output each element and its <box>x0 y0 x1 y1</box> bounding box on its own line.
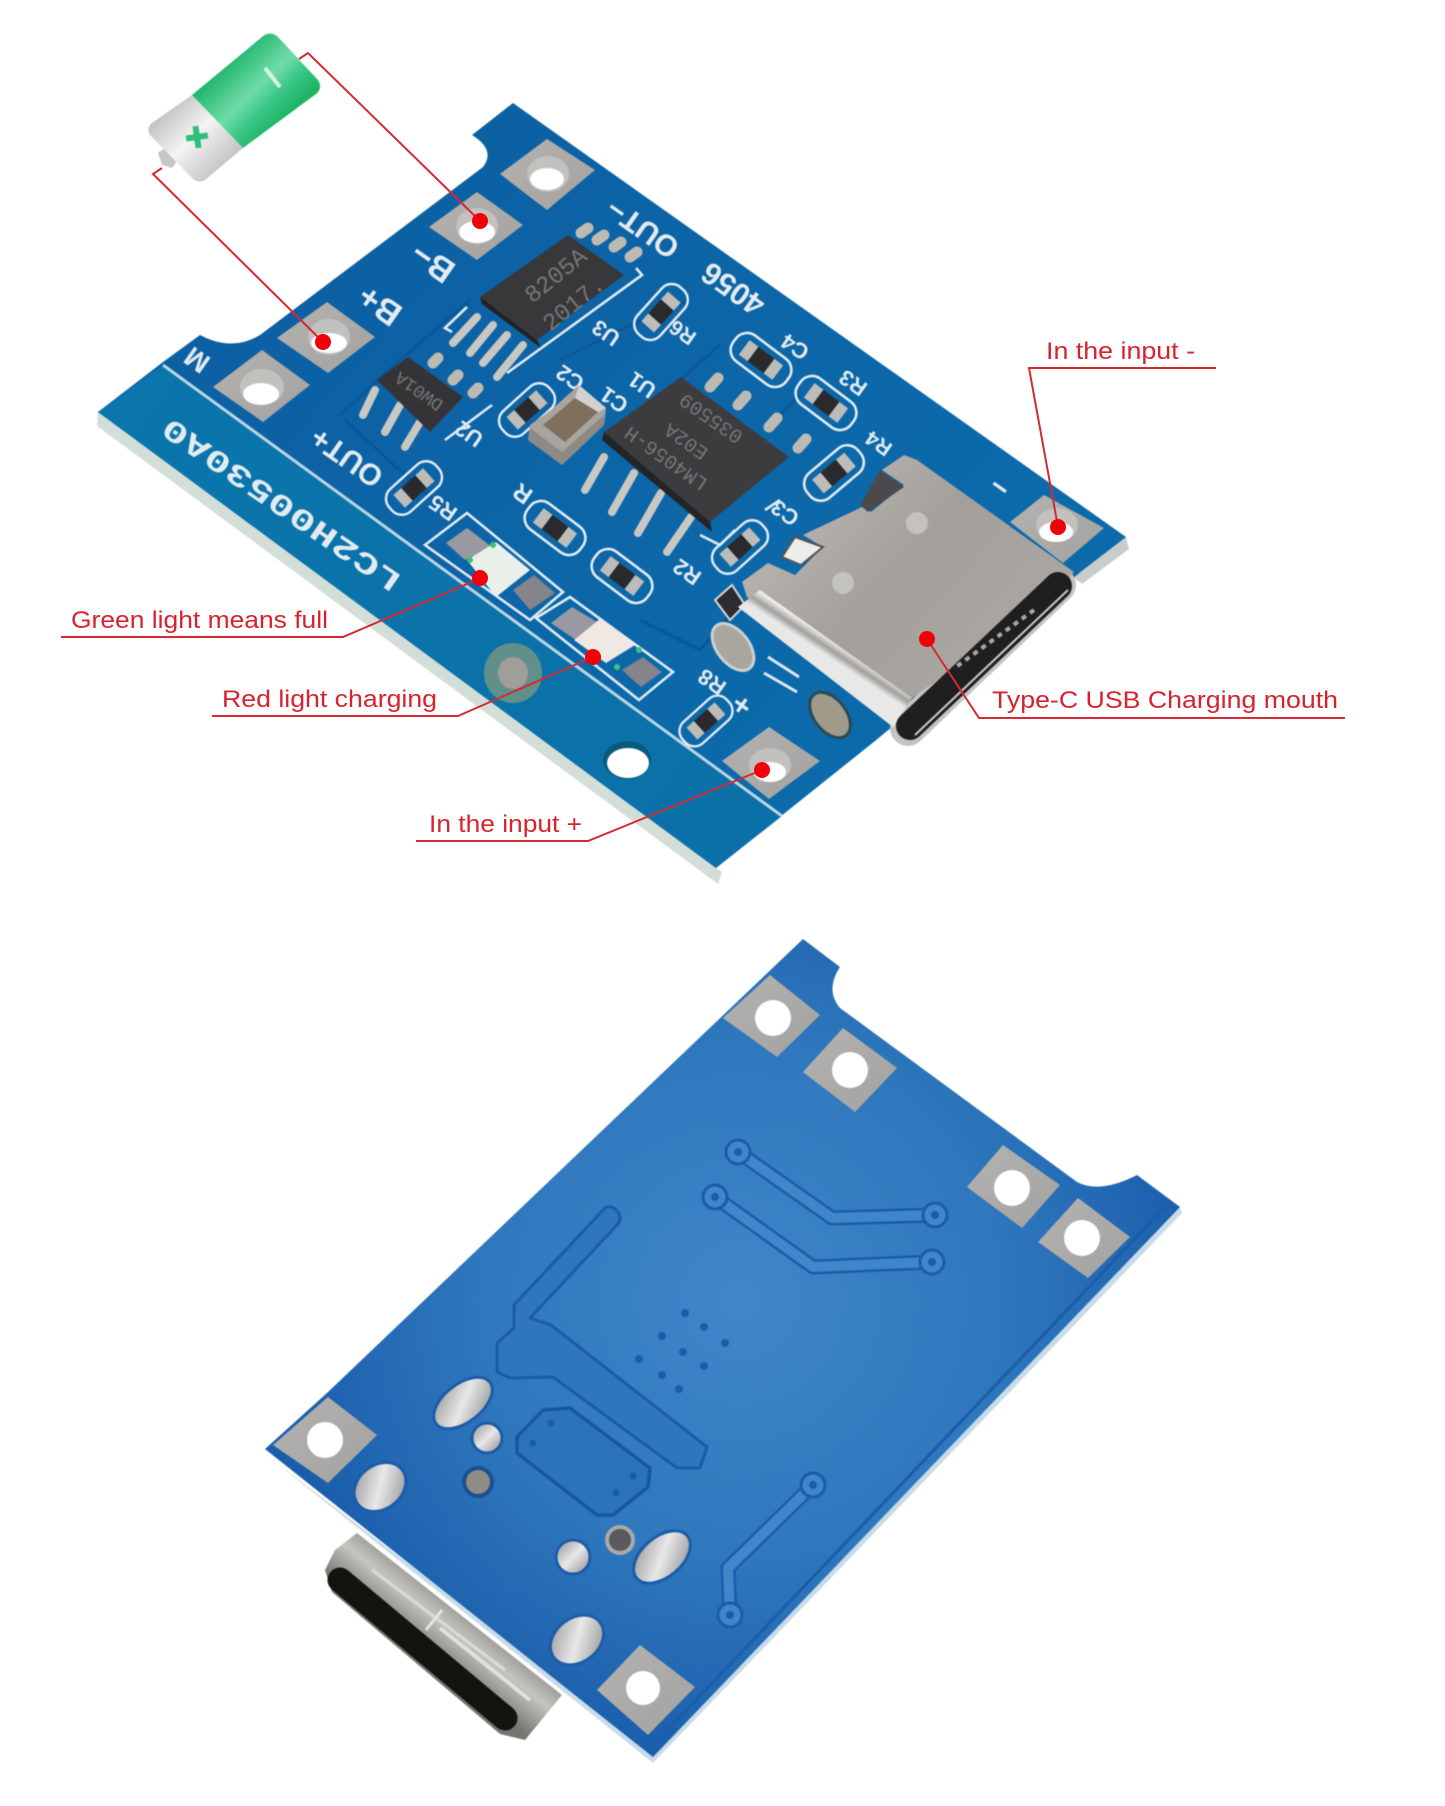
callout: In the input +: In the input + <box>429 811 582 838</box>
silkscreen labels: + <box>725 686 759 724</box>
chip: LM4056: E02A <box>661 417 713 463</box>
capacitor C1 <box>528 385 606 465</box>
silkscreen labels: R2 <box>668 554 706 590</box>
chip: DW01A <box>363 357 492 447</box>
chip: LM4056: 035509 <box>676 387 748 447</box>
pad 4 <box>1038 1198 1130 1278</box>
pad 5 <box>273 1397 377 1483</box>
silkscreen labels: R6 <box>665 315 701 349</box>
silkscreen labels: OUT− <box>600 191 686 265</box>
silkscreen labels: U3 <box>587 315 625 351</box>
plus sign <box>185 125 209 149</box>
silkscreen labels: R <box>508 477 538 509</box>
silkscreen labels: R5 <box>424 490 462 526</box>
connector shell top <box>742 455 1074 713</box>
callout: Red light charging: Red light charging <box>222 686 437 713</box>
callout: In the input - <box>1029 338 1216 535</box>
board edge <box>265 1207 1182 1763</box>
callout: battery positive to B+ <box>153 168 331 350</box>
traces <box>703 1140 947 1627</box>
callout: Green light means full: Green light means full <box>71 607 328 634</box>
pad: B- <box>429 192 523 260</box>
silkscreen labels: R4 <box>861 426 897 460</box>
chip: LM4056 <box>585 377 806 552</box>
chip: 8205A <box>445 228 642 377</box>
battery tip <box>158 148 178 168</box>
pad 3 <box>967 1145 1060 1228</box>
connector opening <box>910 586 1058 726</box>
silkscreen labels: OUT+ <box>304 420 390 494</box>
silkscreen labels: R8 <box>693 664 731 700</box>
silkscreen labels: M <box>179 341 215 379</box>
dimples <box>832 512 928 594</box>
callout: battery negative to B- <box>299 53 488 229</box>
copper traces <box>340 300 800 650</box>
silkscreen labels: C4 <box>776 328 814 365</box>
battery silver end <box>148 95 243 182</box>
edge trace <box>660 1207 1165 1738</box>
pad: M <box>213 350 310 422</box>
shiny side strip <box>738 590 912 727</box>
chip: 8205A: 8205A <box>521 243 594 310</box>
pad: B+ <box>277 302 375 373</box>
silkscreen labels <box>157 191 1017 724</box>
pad 6 <box>597 1645 695 1735</box>
callout: Red light charging <box>212 649 601 716</box>
callout: Type-C USB Charging mouth: Type-C USB Charging mouth <box>992 687 1338 714</box>
silkscreen labels: R3 <box>834 365 872 401</box>
board right side edge <box>1070 537 1129 584</box>
USB connector rear view <box>325 1533 562 1740</box>
callout: Green light means full <box>61 570 488 637</box>
small parts beside connector <box>704 585 859 745</box>
large copper island <box>497 1207 707 1468</box>
pad: input minus <box>1010 495 1104 563</box>
battery green body <box>192 34 320 148</box>
callout: In the input + <box>416 762 770 841</box>
board face <box>98 103 1126 868</box>
chip: 8205A: 2017. <box>539 272 611 338</box>
Type-C connector <box>738 455 1074 735</box>
callout: In the input -: In the input - <box>1046 338 1195 365</box>
silkscreen labels: − <box>983 468 1017 506</box>
bright tab <box>782 537 823 565</box>
bottom board: solder side <box>265 939 1182 1763</box>
pad 1 <box>723 975 820 1057</box>
silkscreen labels: LC2H00530A0 <box>157 409 409 597</box>
pad: input plus <box>722 727 820 799</box>
pad: OUT- <box>500 139 595 210</box>
silkscreen labels: C1 <box>595 382 633 418</box>
solder joints <box>344 1367 700 1675</box>
copper octagon <box>517 1408 650 1515</box>
board side edge <box>97 412 722 884</box>
silkscreen labels: C2 <box>551 360 589 396</box>
resistors and capacitors <box>381 279 870 752</box>
silkscreen labels: 4056 <box>695 255 771 323</box>
lower strip <box>98 365 782 868</box>
chip: DW01A: DW01A <box>392 366 448 414</box>
silkscreen labels: U2 <box>450 416 488 452</box>
test point <box>484 643 542 703</box>
silkscreen labels: U1 <box>623 367 661 403</box>
silkscreen labels: C3 <box>766 495 804 531</box>
via grid <box>635 1309 729 1393</box>
silkscreen labels: B+ <box>351 277 409 333</box>
pad 2 <box>803 1028 897 1112</box>
battery icon <box>148 34 320 182</box>
silkscreen labels: B− <box>404 234 462 290</box>
board face <box>265 939 1180 1757</box>
LED: green <box>425 513 563 620</box>
chip: LM4056: LM4056-H <box>621 420 713 494</box>
minus sign <box>265 68 280 87</box>
LED: red <box>536 597 673 700</box>
mounting hole <box>603 741 651 779</box>
clip notch <box>860 470 904 512</box>
top board: component side <box>97 103 1129 884</box>
strip divider line <box>163 365 782 816</box>
connector mouth rim <box>908 585 1058 728</box>
callout: Type-C USB Charging mouth <box>919 631 1345 718</box>
